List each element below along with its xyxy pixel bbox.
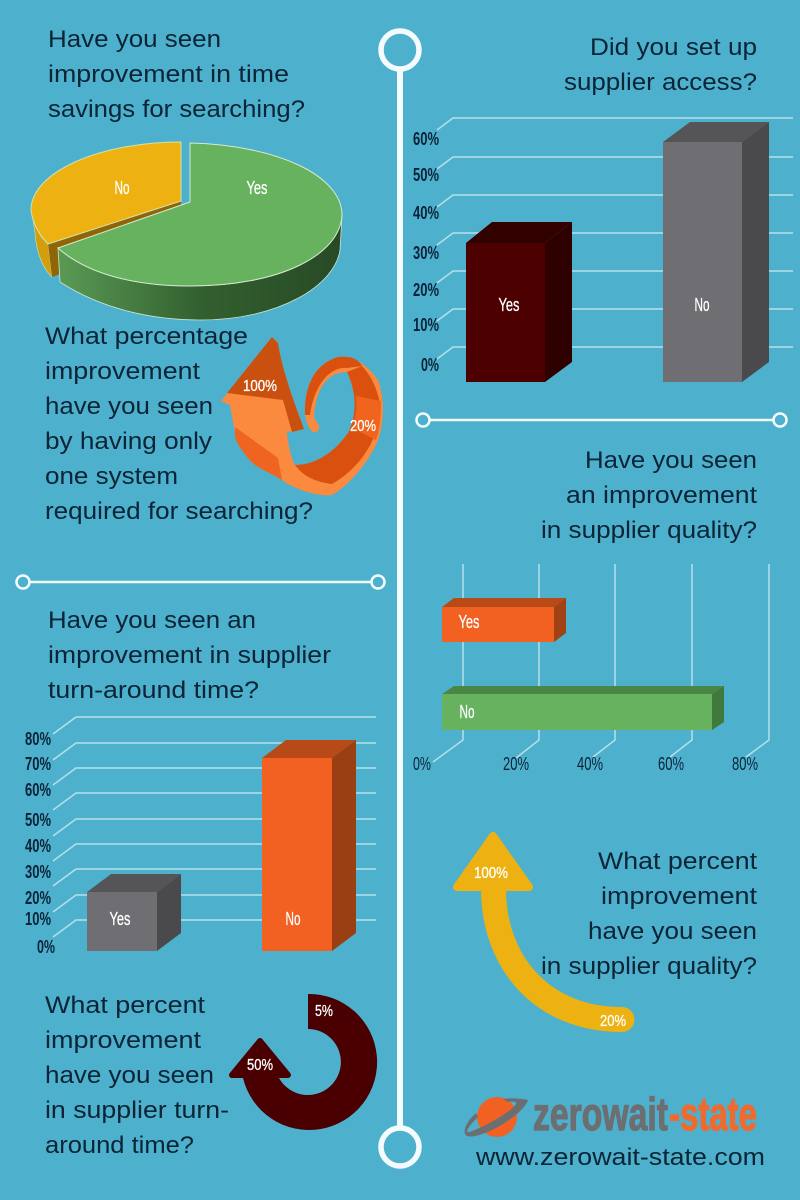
axis labels xyxy=(25,729,55,957)
heading: time savings xyxy=(48,26,305,123)
heading: turn-around time: turn-around time? xyxy=(48,677,259,704)
bar: No: No xyxy=(460,702,474,722)
axis labels: 60% xyxy=(413,129,439,149)
heading: percent improvement turn-around: in supplier turn- xyxy=(45,1097,229,1124)
heading: percent improvement turn-around: improvement xyxy=(45,1027,201,1054)
pie label: Yes: Yes xyxy=(246,178,268,198)
icon: dark circular arrow xyxy=(232,994,377,1130)
heading: time savings: Have you seen xyxy=(48,26,221,53)
spiral silhouette xyxy=(221,337,383,495)
axis labels: 40% xyxy=(25,836,51,856)
logo wordmark: zerowait xyxy=(533,1088,668,1140)
axis labels: 0% xyxy=(37,937,55,957)
logo planet xyxy=(477,1097,517,1137)
heading: time savings: improvement in time xyxy=(48,61,289,88)
heading: percentage improvement: improvement xyxy=(45,358,200,385)
arrow shaft shade xyxy=(235,427,282,480)
axis labels: 0% xyxy=(421,355,439,375)
heading: turn-around time: Have you seen an xyxy=(48,607,256,634)
pie slice top: Yes xyxy=(58,143,342,286)
bar: Yes: Yes xyxy=(498,295,520,315)
heading: percent improvement quality xyxy=(541,848,757,980)
label: 50%: 50% xyxy=(247,1057,273,1074)
pie slice side: Yes xyxy=(58,215,342,320)
heading: supplier quality: an improvement xyxy=(566,482,757,509)
label: 20%: 20% xyxy=(600,1013,626,1030)
heading: supplier quality xyxy=(541,447,757,544)
logo: zerowait-state: -state xyxy=(669,1088,757,1140)
left divider xyxy=(16,576,384,588)
heading: percent improvement turn-around: around time? xyxy=(45,1132,194,1159)
heading: supplier quality: Have you seen xyxy=(585,447,757,474)
axis labels: 60% xyxy=(25,780,51,800)
bar: Yes xyxy=(87,874,181,951)
bar chart: turn-around time xyxy=(25,717,376,957)
heading: percent improvement quality: have you seen xyxy=(588,918,757,945)
heading: time savings: savings for searching? xyxy=(48,96,305,123)
heading: supplier access: Did you set up xyxy=(590,34,757,61)
heading: supplier quality: in supplier quality? xyxy=(541,517,757,544)
axis labels xyxy=(413,754,758,774)
right divider xyxy=(416,414,786,426)
axis labels: 80% xyxy=(732,754,758,774)
heading: percent improvement turn-around: have you seen xyxy=(45,1062,214,1089)
bar: Yes: Yes xyxy=(110,909,130,929)
bar: No: No xyxy=(286,909,300,929)
heading: percent improvement turn-around xyxy=(45,992,229,1159)
heading: percent improvement turn-around: What percent xyxy=(45,992,205,1019)
axis labels xyxy=(413,129,439,375)
logo ring xyxy=(465,1098,528,1137)
grid lines xyxy=(437,118,793,359)
heading: percent improvement quality: What percent xyxy=(598,848,757,875)
bar: Yes: Yes xyxy=(458,612,480,632)
bar: No: No xyxy=(694,295,710,315)
heading: percent improvement quality: in supplier quality? xyxy=(541,953,757,980)
icon: yellow curved arrow xyxy=(457,836,626,1030)
axis labels: 40% xyxy=(413,203,439,223)
spiral inner curl xyxy=(305,357,362,415)
axis labels: 10% xyxy=(25,909,51,929)
heading: percentage improvement: What percentage xyxy=(45,323,248,350)
bar: Yes xyxy=(442,598,566,642)
bar: No xyxy=(442,686,724,730)
heading: percent improvement quality: improvement xyxy=(601,883,757,910)
axis labels: 30% xyxy=(413,243,439,263)
label: 5%: 5% xyxy=(315,1003,333,1020)
heading: turn-around time xyxy=(48,607,331,704)
heading: percentage improvement: have you seen xyxy=(45,393,213,420)
icon: orange spiral arrow xyxy=(221,337,383,495)
pie slice side: No xyxy=(32,213,52,277)
axis labels: 20% xyxy=(25,888,51,908)
bar chart: supplier access xyxy=(413,118,793,382)
bar: No xyxy=(262,740,356,951)
bar: No xyxy=(663,122,769,382)
central timeline xyxy=(381,31,419,1166)
heading: percentage improvement: one system xyxy=(45,463,178,490)
heading: percentage improvement: by having only xyxy=(45,428,212,455)
pie slice top: No xyxy=(31,142,181,244)
axis labels: 50% xyxy=(413,165,439,185)
grid lines xyxy=(53,717,376,937)
spiral label: 20%: 20% xyxy=(350,418,376,435)
axis labels: 20% xyxy=(413,280,439,300)
heading: supplier access xyxy=(564,34,757,96)
heading: percentage improvement: required for searching? xyxy=(45,498,313,525)
axis labels: 50% xyxy=(25,810,51,830)
axis labels: 20% xyxy=(503,754,529,774)
heading: turn-around time: improvement in supplier xyxy=(48,642,331,669)
axis labels: 80% xyxy=(25,729,51,749)
grid lines xyxy=(433,564,769,762)
horizontal bar chart: supplier quality xyxy=(413,564,769,774)
spiral band xyxy=(295,366,380,484)
axis labels: 60% xyxy=(658,754,684,774)
website url: www.zerowait-state.com xyxy=(475,1144,765,1171)
axis labels: 30% xyxy=(25,862,51,882)
logo: zerowait-state xyxy=(465,1088,757,1140)
axis labels: 0% xyxy=(413,754,431,774)
axis labels: 40% xyxy=(577,754,603,774)
spiral label: 100%: 100% xyxy=(243,378,277,395)
heading: percentage improvement xyxy=(45,323,313,525)
pie chart: time savings xyxy=(31,142,342,320)
arrow head shade xyxy=(227,337,304,432)
axis labels: 70% xyxy=(25,754,51,774)
axis labels: 10% xyxy=(413,315,439,335)
heading: supplier access: supplier access? xyxy=(564,69,757,96)
label: 100%: 100% xyxy=(474,865,508,882)
bar: Yes xyxy=(466,222,572,382)
pie label: No: No xyxy=(114,178,130,198)
